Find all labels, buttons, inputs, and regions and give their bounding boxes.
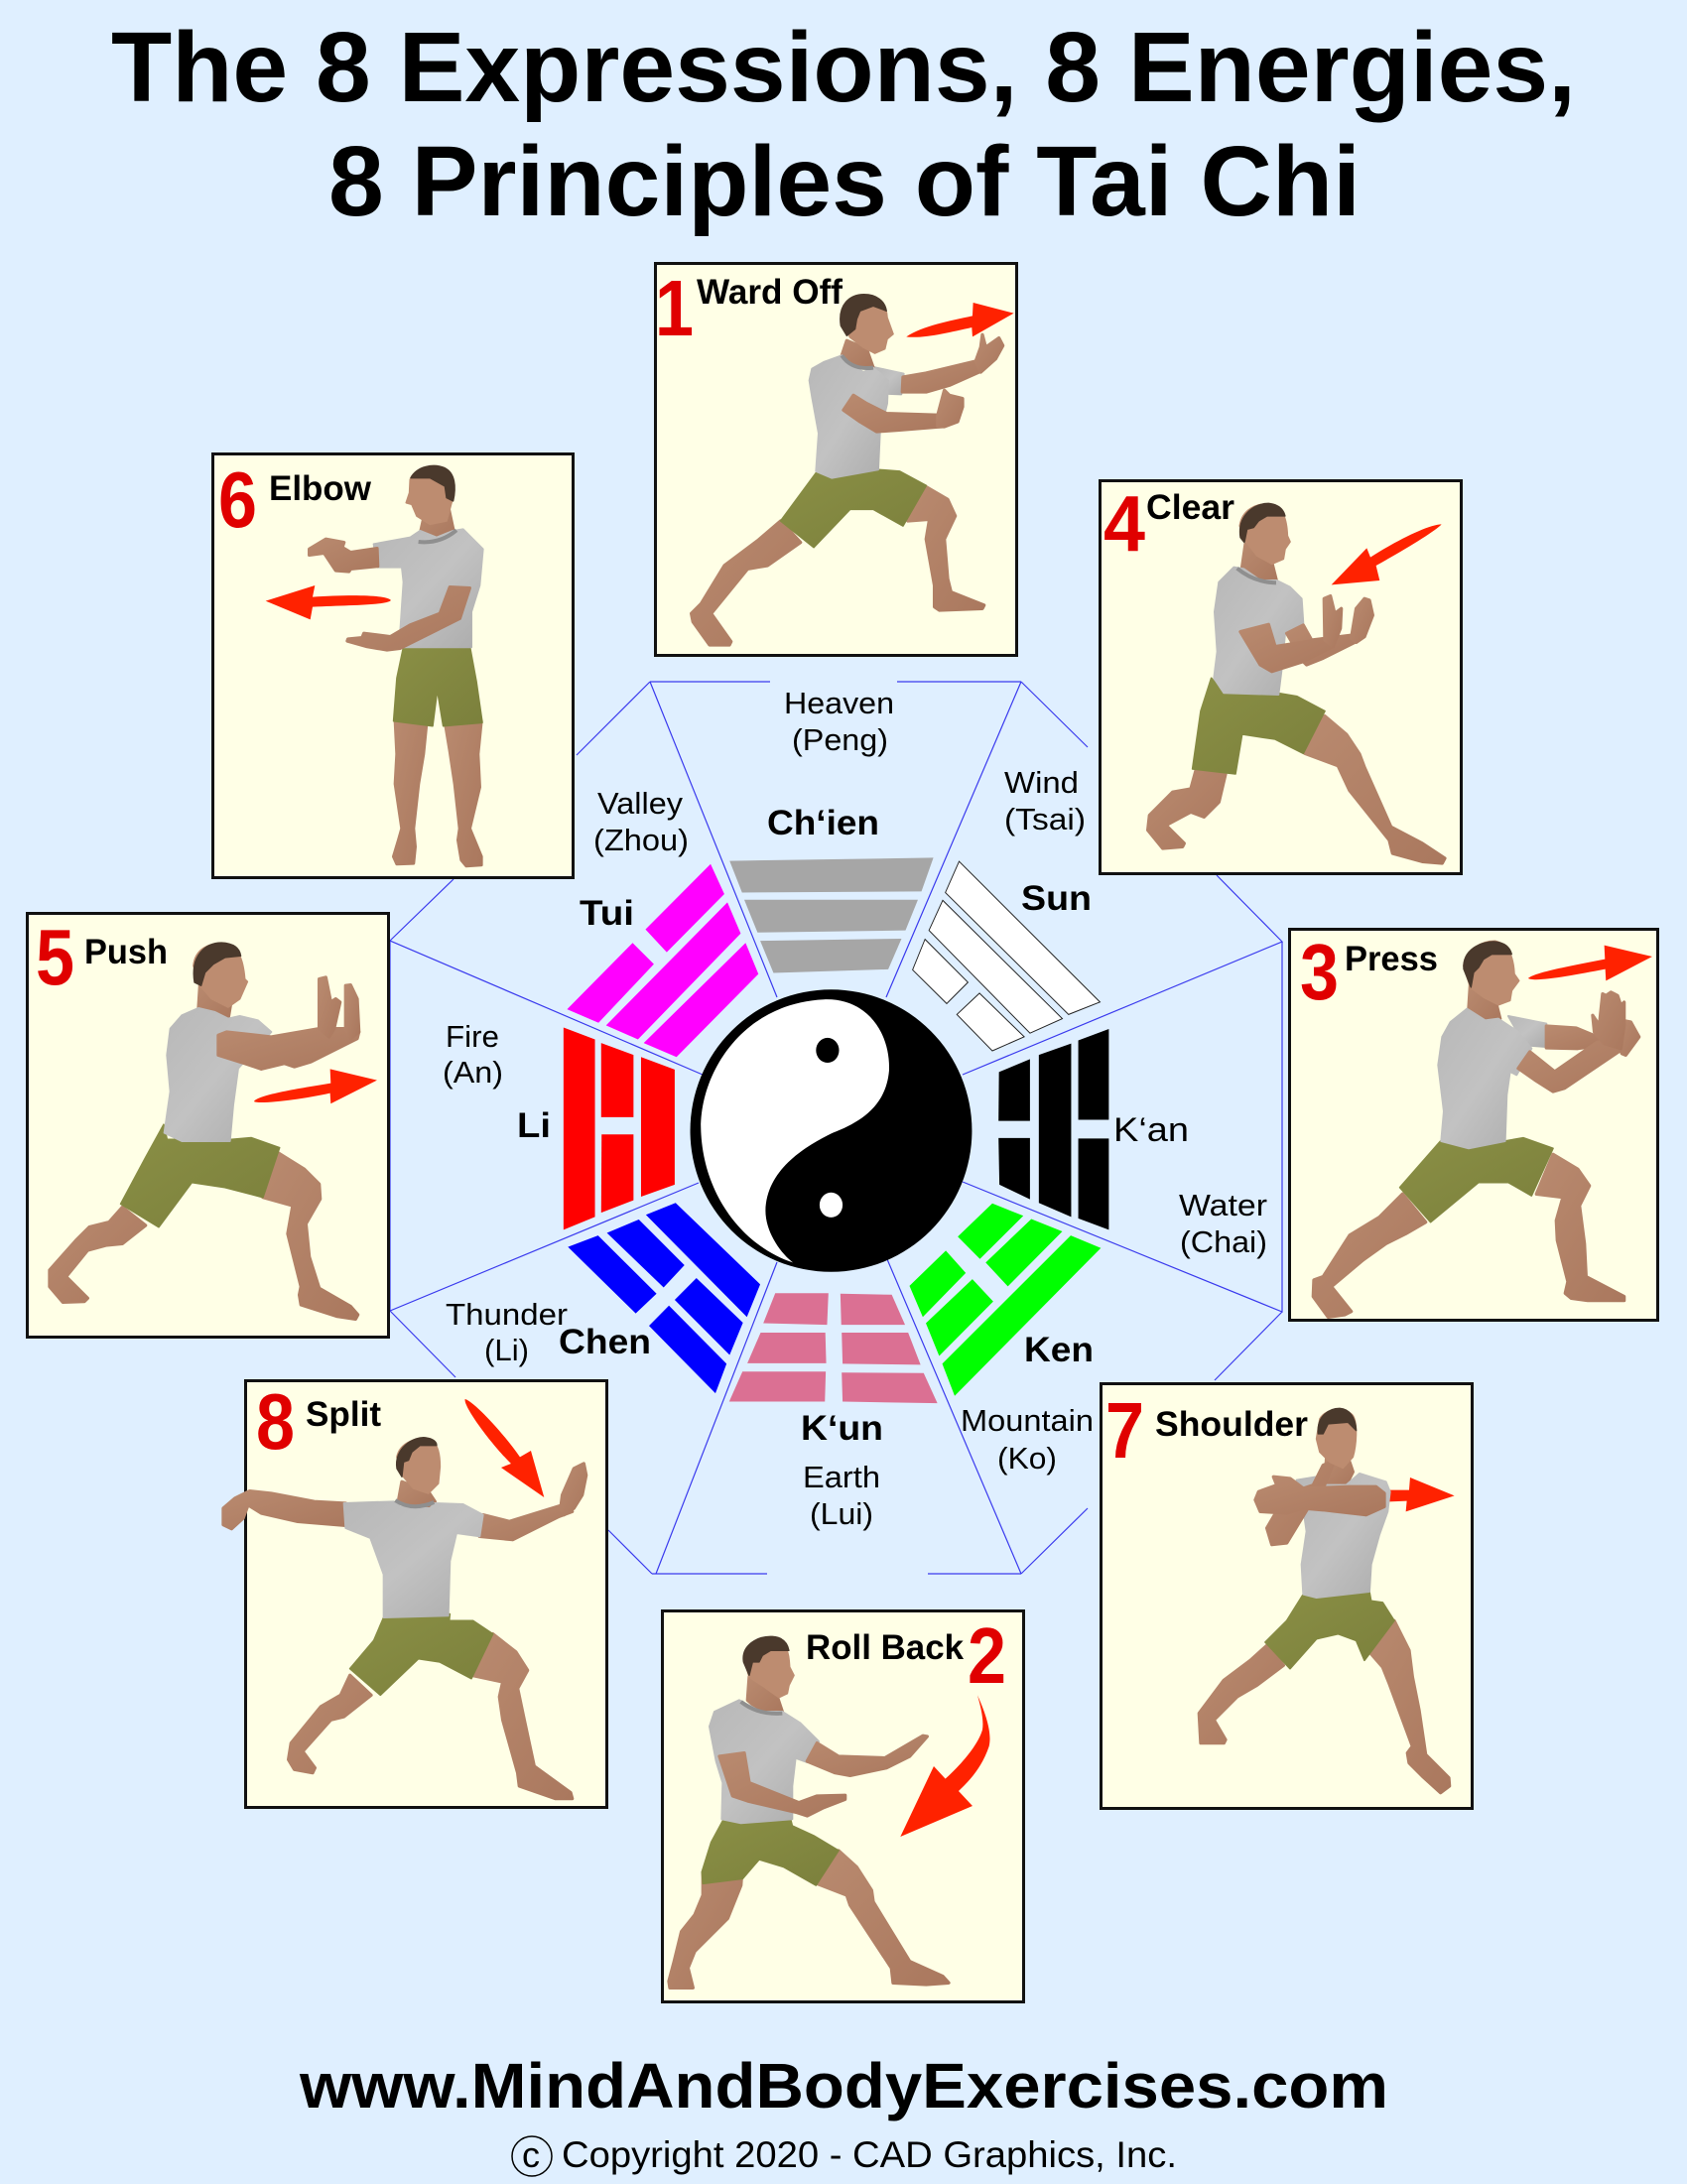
figure: elbow (266, 465, 483, 866)
trigram and element labels: (Chai) (1180, 1224, 1267, 1259)
figure: push (50, 943, 377, 1319)
trigram and element labels: Earth (803, 1460, 880, 1494)
number 8: 8 (256, 1377, 295, 1466)
bagua trigrams diagram (564, 857, 1108, 1403)
label: Split: Split (306, 1395, 381, 1434)
trigram and element labels: Thunder (446, 1297, 568, 1332)
trigram and element labels: (Peng) (792, 722, 888, 757)
trigram: Tui (567, 864, 758, 1057)
number 5: 5 (36, 913, 74, 1001)
trigram and element labels: Chen (559, 1323, 651, 1361)
trigram and element labels: Wind (1004, 765, 1079, 800)
figure: press (1313, 941, 1652, 1317)
trigram and element labels: (Lui) (810, 1496, 873, 1531)
trigram and element labels: Heaven (784, 686, 894, 720)
bagua guide lines (390, 682, 1282, 1574)
figure: clear (1148, 503, 1445, 863)
copyright line: Copyright 2020 - CAD Graphics, Inc. (562, 2134, 1177, 2175)
trigram and element labels: Ch‘ien (767, 804, 879, 842)
arrow (1528, 946, 1652, 980)
number 1: 1 (655, 264, 694, 352)
trigram: K'un (729, 1293, 938, 1403)
trigram and element labels: K‘an (1113, 1111, 1189, 1149)
trigram and element labels: Water (1179, 1188, 1267, 1222)
trigram and element labels: (Zhou) (593, 823, 689, 857)
trigram: Chen (568, 1203, 760, 1393)
trigram and element labels: Mountain (961, 1403, 1094, 1438)
number 3: 3 (1300, 928, 1339, 1016)
number 7: 7 (1105, 1386, 1144, 1475)
figure: split (223, 1399, 586, 1799)
panel: 3 Press (1290, 928, 1657, 1320)
trigram and element labels: Valley (597, 786, 684, 821)
trigram: Ch'ien (729, 857, 934, 973)
arrow (465, 1399, 544, 1497)
trigram and element labels: (Tsai) (1004, 802, 1086, 836)
arrow (1389, 1477, 1455, 1511)
number 4: 4 (1103, 479, 1145, 568)
yin yang symbol (691, 989, 972, 1272)
trigram: K'an (998, 1029, 1108, 1229)
panel: 6 Elbow (212, 454, 574, 877)
figure: ward off (692, 295, 1014, 645)
panel: 2 Roll Back (663, 1611, 1024, 2002)
copyright line: c (522, 2134, 540, 2175)
trigram and element labels: (Ko) (997, 1441, 1057, 1476)
label: Roll Back: Roll Back (806, 1628, 965, 1667)
panel: 4 Clear (1100, 479, 1461, 873)
label: Ward Off: Ward Off (697, 273, 843, 312)
arrow (266, 585, 391, 619)
arrow (900, 1695, 990, 1837)
trigram: Ken (909, 1204, 1101, 1396)
arrow (1332, 524, 1442, 584)
panel: 5 Push (28, 913, 389, 1338)
label: Shoulder: Shoulder (1155, 1405, 1308, 1444)
figure: shoulder (1199, 1408, 1455, 1793)
trigram and element labels: Fire (446, 1019, 499, 1054)
title (111, 12, 1576, 237)
label: Clear: Clear (1146, 488, 1234, 527)
trigram and element labels: Li (517, 1106, 551, 1145)
website url: www.MindAndBodyExercises.com (299, 2050, 1388, 2121)
trigram: Sun (913, 861, 1100, 1051)
panel: 8 Split (223, 1377, 607, 1808)
trigram and element labels: (Li) (484, 1333, 529, 1367)
number 2: 2 (968, 1611, 1006, 1700)
arrow (906, 303, 1014, 337)
panel: 7 Shoulder (1102, 1383, 1473, 1808)
title: 8 Principles of Tai Chi (328, 126, 1361, 237)
trigram and element labels (443, 686, 1267, 1531)
trigram and element labels: Ken (1024, 1331, 1094, 1369)
label: Push: Push (84, 933, 168, 971)
trigram and element labels: (An) (443, 1055, 503, 1090)
trigram and element labels: Tui (580, 894, 634, 933)
title: The 8 Expressions, 8 Energies, (111, 12, 1576, 123)
label: Press: Press (1345, 940, 1438, 978)
number 6: 6 (218, 455, 257, 544)
trigram and element labels: K‘un (801, 1409, 883, 1448)
arrow (254, 1069, 377, 1103)
label: Elbow: Elbow (269, 469, 372, 508)
trigram and element labels: Sun (1021, 879, 1092, 918)
panel: 1 Ward Off (655, 264, 1016, 655)
figure: roll back (669, 1636, 990, 1988)
trigram: Li (564, 1027, 675, 1229)
